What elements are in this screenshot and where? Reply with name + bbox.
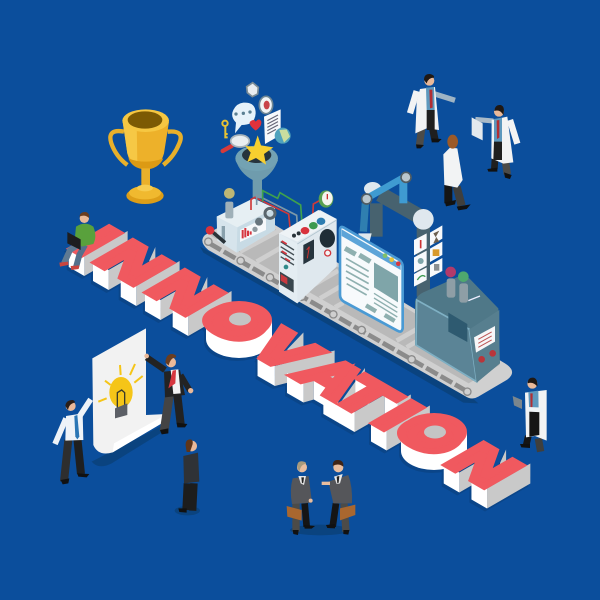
funnel bbox=[236, 160, 278, 198]
conveyor production line bbox=[200, 83, 512, 403]
side: T bbox=[308, 370, 428, 440]
icon: speech bubble bbox=[232, 103, 256, 133]
poster with lightbulb and two men bbox=[55, 328, 200, 515]
side: second N bbox=[128, 266, 249, 336]
letter top faces: A bbox=[279, 347, 384, 408]
letter side faces bbox=[51, 222, 548, 508]
machine 3 teal cabinet bbox=[415, 267, 500, 383]
word: INNOVATION in 3D isometric letters bbox=[51, 219, 548, 508]
icon: clock gauge bbox=[319, 190, 333, 208]
letter top faces: I bbox=[56, 219, 134, 264]
letter top faces: N bbox=[132, 263, 237, 323]
letter top faces: N bbox=[431, 435, 536, 496]
side: last N bbox=[426, 438, 548, 508]
icon: globe bbox=[275, 128, 291, 144]
icon: document bbox=[264, 109, 281, 144]
scientists team bbox=[410, 74, 517, 210]
icon tiles bbox=[414, 225, 442, 287]
letter top faces: O bbox=[183, 293, 287, 353]
man in white shirt bbox=[55, 399, 91, 484]
side: first N bbox=[76, 236, 197, 306]
icon: nut bbox=[247, 83, 258, 97]
letter top faces: O bbox=[378, 405, 482, 465]
browser window bbox=[340, 227, 403, 332]
letter top faces: T bbox=[315, 369, 414, 425]
icon: heart bbox=[250, 119, 261, 131]
businessman right bbox=[322, 460, 355, 535]
shadow under businessmen bbox=[290, 525, 350, 535]
round O bodies bbox=[206, 301, 467, 470]
side: V bbox=[240, 331, 352, 396]
man seen from behind bbox=[175, 439, 200, 515]
letter top faces: N bbox=[80, 233, 185, 293]
icon: star bbox=[245, 135, 273, 165]
man in suit holding poster bbox=[144, 354, 193, 434]
businessman left bbox=[287, 461, 315, 535]
O holes bbox=[229, 312, 446, 438]
side: A bbox=[270, 348, 400, 424]
icons dropping into funnel bbox=[222, 83, 291, 198]
poster shadow bbox=[92, 427, 168, 466]
scientist pointing bbox=[410, 74, 455, 148]
icon: target bbox=[259, 96, 273, 114]
wires bbox=[251, 191, 321, 227]
icon: lightbulb bbox=[98, 364, 143, 418]
icon: magnifier bbox=[223, 146, 232, 151]
person: man with laptop bbox=[59, 212, 95, 270]
letter top faces: V bbox=[234, 321, 335, 380]
machine 2 control tower bbox=[279, 210, 337, 303]
robot arm bbox=[358, 172, 434, 297]
scientist from behind bbox=[443, 135, 471, 210]
paper poster bbox=[92, 328, 167, 454]
scientist with paper bbox=[472, 105, 517, 179]
doctor with tablet bbox=[513, 378, 547, 452]
conveyor belt bbox=[200, 210, 512, 403]
side: first I bbox=[51, 222, 145, 276]
icon: key bbox=[222, 121, 228, 138]
machine 1 bbox=[206, 188, 275, 253]
business men and doctor with tablet bbox=[287, 378, 547, 535]
letter top faces: I bbox=[358, 393, 436, 438]
icon: gold trophy bbox=[110, 109, 181, 204]
side: second I bbox=[354, 396, 447, 450]
